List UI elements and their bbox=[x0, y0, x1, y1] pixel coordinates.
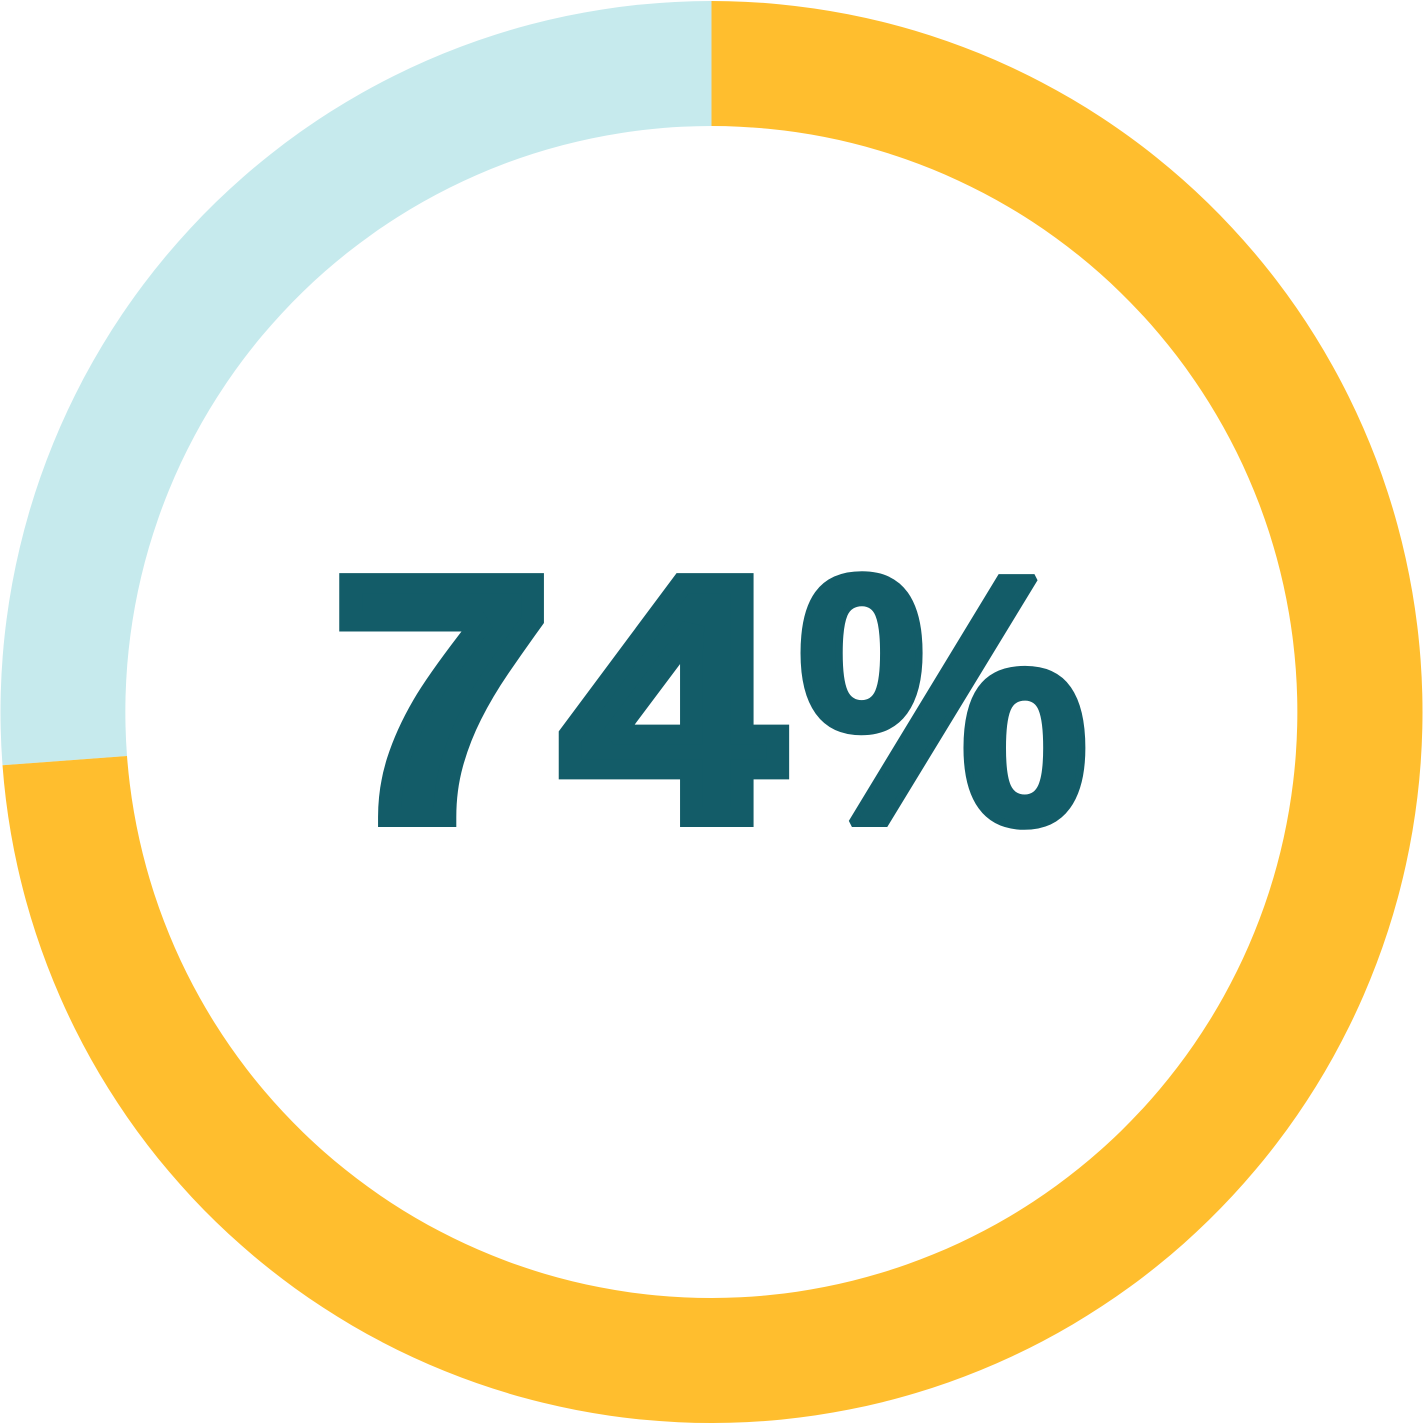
center value: 74%: 4 bbox=[564, 510, 782, 890]
center value: 74% bbox=[334, 501, 1090, 899]
center value: 74%: % bbox=[796, 501, 1090, 899]
ring segment: remainder (light blue) bbox=[0, 1, 712, 765]
center value: 74%: 7 bbox=[334, 510, 550, 890]
